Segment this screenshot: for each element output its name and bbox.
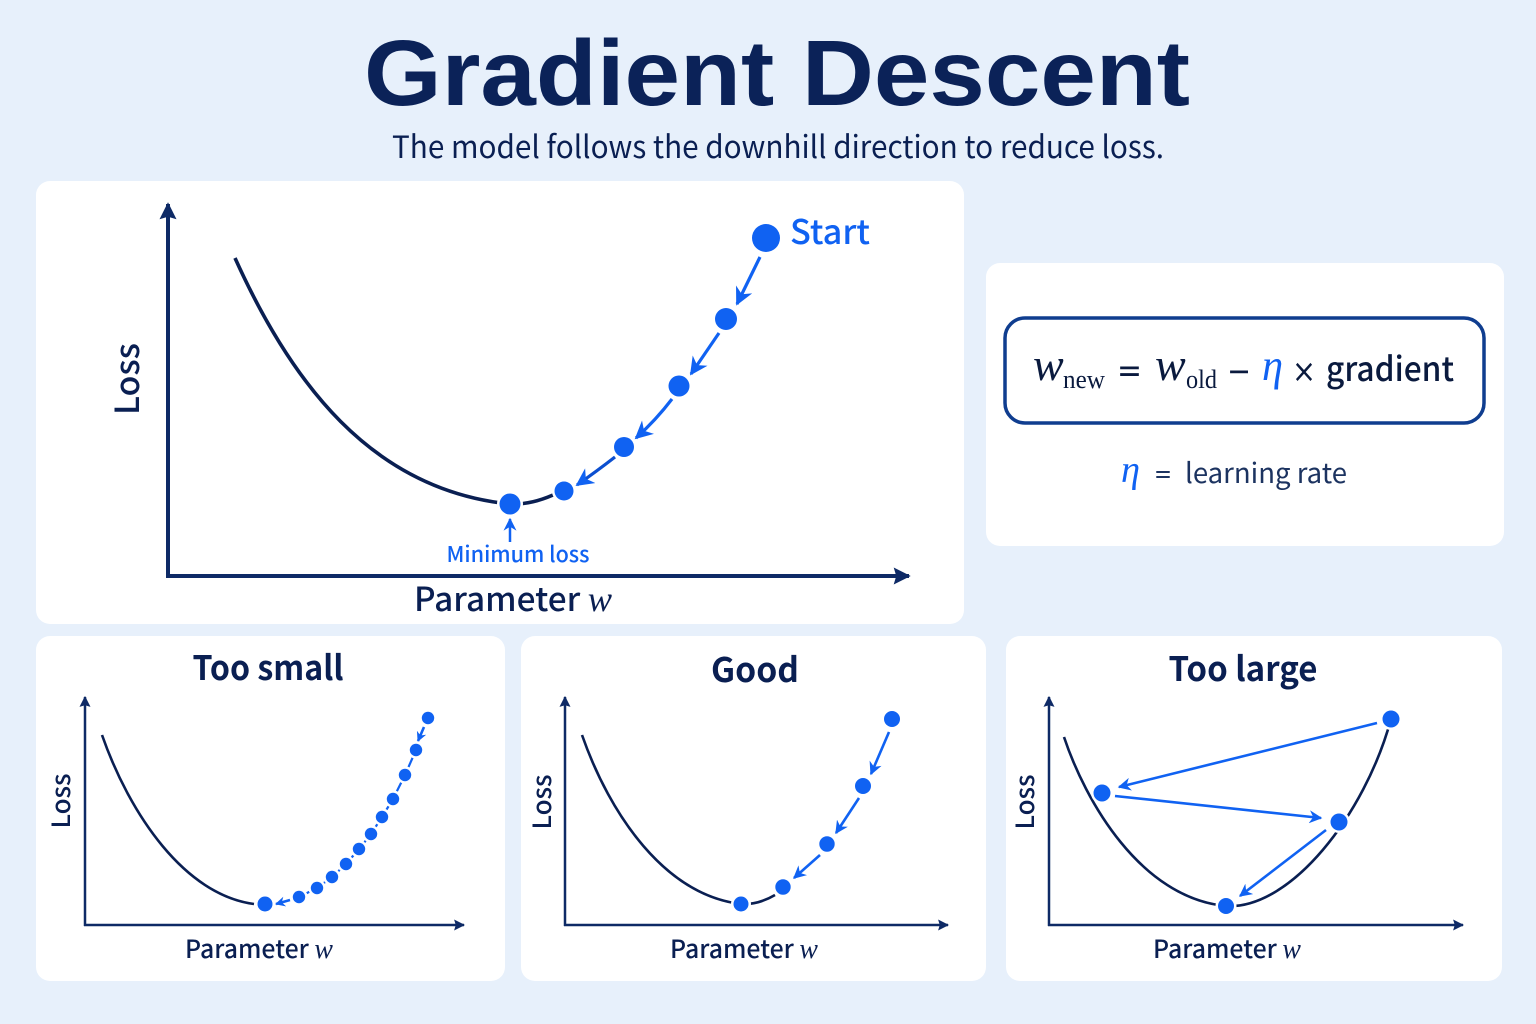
descent points: [500, 224, 780, 514]
chart axes: [166, 204, 909, 578]
learning rate legend: [1121, 449, 1347, 492]
descent arrows: [577, 257, 760, 485]
minimum label: Minimum loss: [446, 537, 590, 569]
loss curve: [235, 258, 553, 504]
x label: Parameter w: [670, 930, 818, 966]
formula: η: [1262, 341, 1283, 390]
formula: w: [1033, 339, 1064, 390]
formula box: [1005, 318, 1484, 423]
y axis label: Loss: [101, 343, 149, 415]
x label: Parameter w: [185, 930, 333, 966]
curve: [102, 735, 254, 904]
axes: [84, 697, 464, 926]
formula: old: [1186, 365, 1217, 394]
learning rate legend: η: [1121, 449, 1140, 491]
y label: Loss: [523, 774, 559, 830]
panel: good: [521, 636, 986, 981]
x label: Parameter w: [1153, 930, 1301, 966]
panel: too large: [1006, 636, 1502, 981]
start label: Start: [790, 205, 870, 254]
curve: [1064, 719, 1391, 906]
steps: [1094, 710, 1400, 914]
axes: [564, 697, 948, 926]
minimum arrow: [509, 519, 511, 542]
panel: main loss chart: [36, 181, 964, 624]
axes: [1048, 697, 1463, 926]
heading: Too small: [192, 641, 344, 690]
panel: formula: [986, 263, 1504, 546]
subtitle: The model follows the downhill direction to reduce loss.: [392, 122, 1164, 167]
panel: too small: [36, 636, 505, 981]
steps: [734, 711, 900, 912]
x axis label: Parameter w: [414, 573, 612, 621]
formula: −: [1227, 352, 1251, 390]
heading: Too large: [1168, 642, 1318, 691]
formula: gradient: [1326, 342, 1454, 391]
y label: Loss: [42, 774, 78, 828]
formula: new: [1063, 365, 1105, 394]
steps: [258, 712, 434, 912]
heading: Good: [711, 643, 799, 692]
title: Gradient Descent: [364, 21, 1190, 125]
learning rate legend: learning rate: [1185, 452, 1347, 492]
formula: [1033, 339, 1454, 394]
learning rate legend: =: [1154, 460, 1172, 488]
y label: Loss: [1006, 774, 1042, 830]
curve: [582, 735, 775, 904]
formula: w: [1155, 339, 1186, 390]
formula: ×: [1292, 352, 1316, 390]
formula: =: [1117, 351, 1142, 391]
